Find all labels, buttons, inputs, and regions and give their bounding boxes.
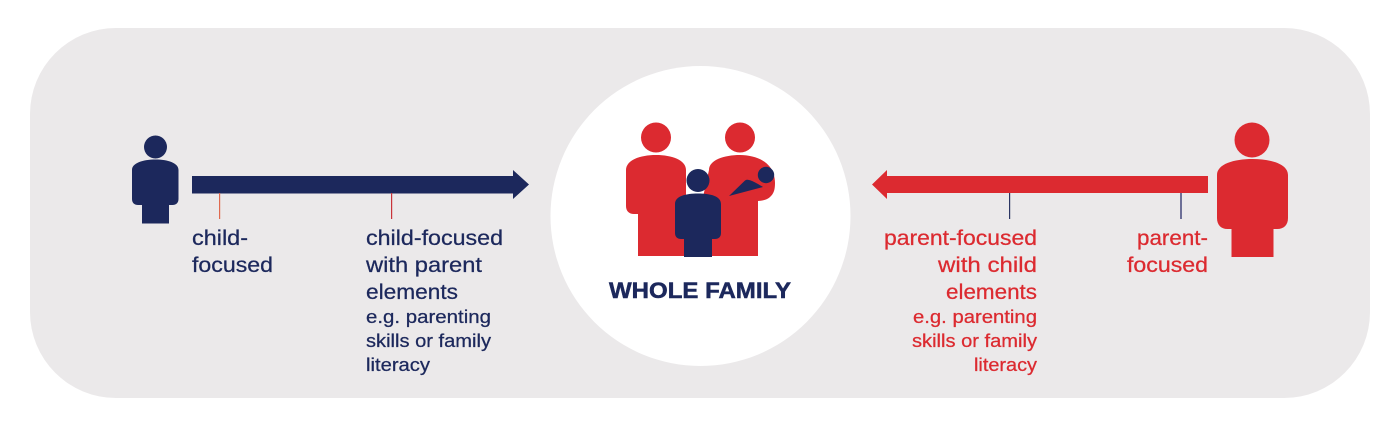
text: child-focused with parent elements: elements xyxy=(366,281,458,304)
text: parent-focused with child elements: literacy xyxy=(974,355,1037,375)
text: parent-focused xyxy=(1127,227,1208,277)
text: child-focused with parent elements: e.g. parenting xyxy=(366,307,491,327)
text: child-focused with parent elements: literacy xyxy=(366,355,430,375)
text: parent-focused with child elements: skills or family xyxy=(912,331,1037,351)
text: parent-focused with child elements xyxy=(884,227,1037,375)
arrow: parent to whole family xyxy=(872,170,1208,199)
arrow: child to whole family xyxy=(192,170,529,199)
text: child-focused with parent elements xyxy=(365,227,503,375)
tick: child-focused xyxy=(219,193,220,219)
icon: whole family group xyxy=(626,122,775,257)
text: child-focused with parent elements: with parent xyxy=(365,254,482,277)
tick: parent-focused with child elements xyxy=(1009,193,1010,219)
icon: baby xyxy=(729,167,774,196)
heading: whole family: WHOLE FAMILY xyxy=(609,278,791,303)
text: child-focused: child- xyxy=(192,227,248,250)
icon: left parent xyxy=(626,122,686,256)
icon: parent figure xyxy=(1217,122,1288,257)
tick: child-focused with parent elements xyxy=(391,193,392,219)
tick: parent-focused xyxy=(1180,193,1182,219)
text: parent-focused with child elements: parent-focused xyxy=(884,227,1037,250)
panel: centre circle xyxy=(550,66,850,366)
text: parent-focused: focused xyxy=(1127,254,1208,277)
text: parent-focused with child elements: e.g. parenting xyxy=(913,307,1037,327)
text: parent-focused with child elements: with child xyxy=(937,254,1037,277)
text: child-focused xyxy=(192,227,273,277)
icon: right parent xyxy=(690,122,775,256)
text: parent-focused: parent- xyxy=(1137,227,1208,250)
text: child-focused: focused xyxy=(192,254,273,277)
text: child-focused with parent elements: skills or family xyxy=(366,331,491,351)
icon: child xyxy=(675,169,721,257)
text: parent-focused with child elements: elements xyxy=(946,281,1037,304)
icon: child figure xyxy=(132,136,178,224)
text: child-focused with parent elements: child-focused xyxy=(366,227,503,250)
